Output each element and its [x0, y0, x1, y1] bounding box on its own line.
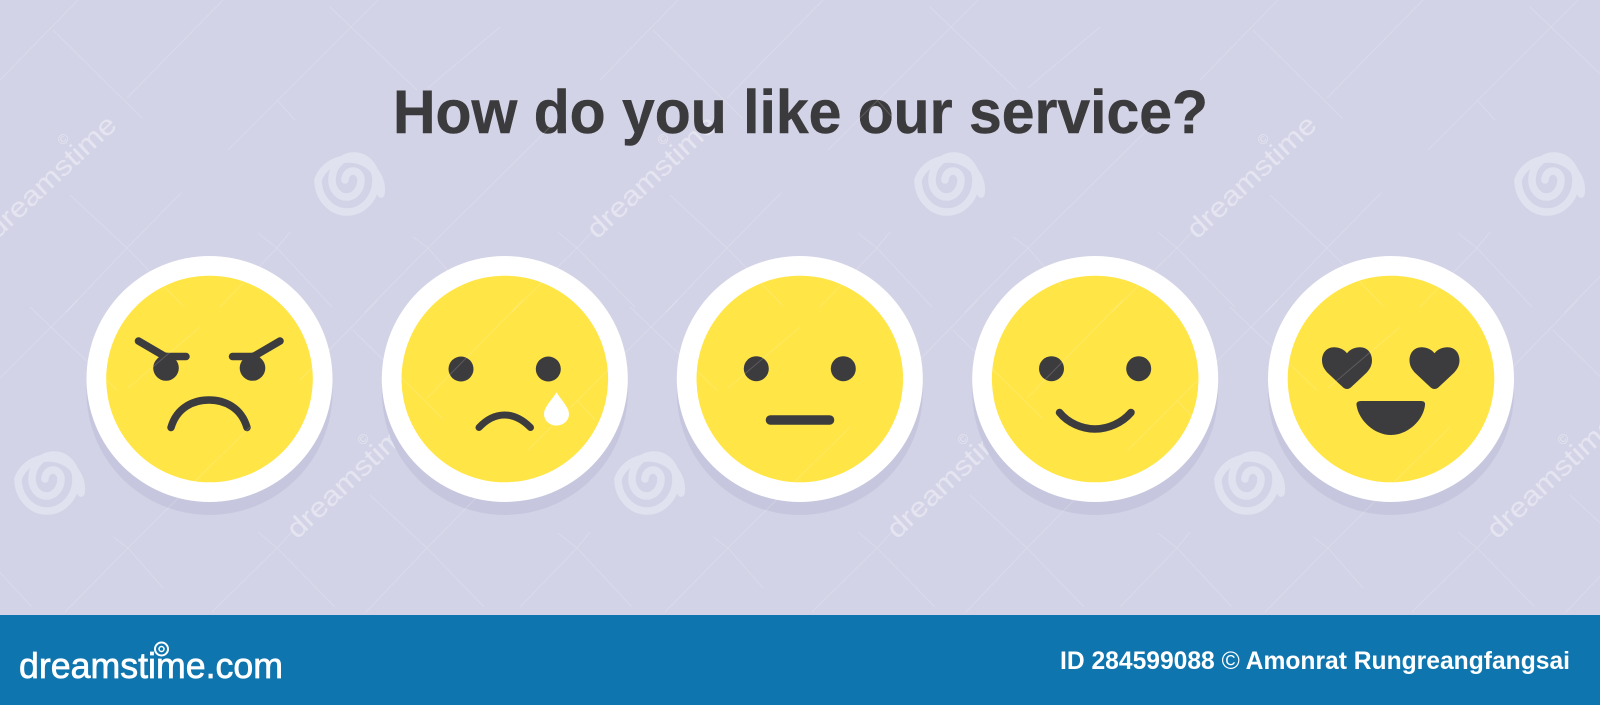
footer logo: dreamstime.com	[19, 645, 283, 686]
title: How do you like our service?	[393, 78, 1208, 146]
watermark text: dreamstime	[880, 409, 1022, 544]
icon: smiling face	[972, 256, 1218, 515]
watermark text: ©	[1554, 429, 1573, 448]
watermark text: dreamstime	[580, 109, 722, 244]
icon: heart-eyes face	[1268, 256, 1514, 515]
watermark spirals	[18, 156, 1581, 511]
icon: angry face	[86, 256, 332, 515]
watermark text: dreamstime	[280, 409, 422, 544]
icon: crying face	[382, 256, 628, 515]
footer credit: ID 284599088 © Amonrat Rungreangfangsai	[1060, 647, 1570, 675]
watermark text: dreamstime	[1180, 109, 1322, 244]
icon: neutral face	[677, 256, 923, 515]
watermark text: ©	[654, 129, 673, 148]
footer bar	[0, 615, 1600, 705]
watermark text: ©	[1254, 129, 1273, 148]
watermark text: ©	[354, 429, 373, 448]
watermark text: ©	[954, 429, 973, 448]
watermark text: ©	[54, 129, 73, 148]
watermark text	[0, 100, 1600, 544]
